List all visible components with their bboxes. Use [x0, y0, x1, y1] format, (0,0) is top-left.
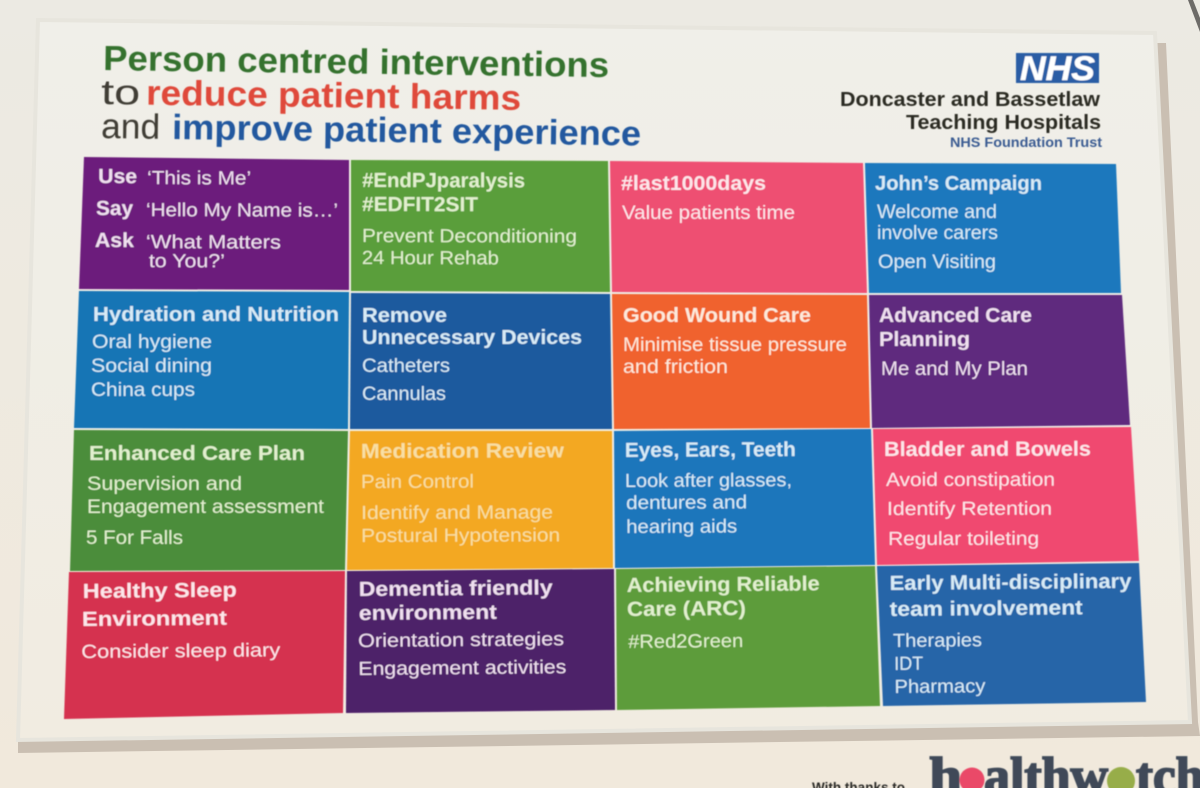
panel text: Avoid constipation: [886, 470, 1055, 491]
panel text: China cups: [91, 380, 195, 401]
panel text: [875, 172, 1042, 273]
panel text: Social dining: [91, 356, 212, 377]
panel text: Identify Retention: [887, 499, 1052, 520]
panel text: Remove: [362, 304, 447, 327]
title: improve patient experience: [172, 108, 641, 154]
panel text: Therapies: [893, 630, 982, 652]
panel text: John’s Campaign: [875, 172, 1042, 195]
title: [101, 39, 641, 154]
panel text: Early Multi-disciplinary: [889, 570, 1132, 595]
panel text: Postural Hypotension: [361, 525, 560, 547]
panel: Dementia friendly environment: [346, 569, 615, 713]
panel: Good Wound Care: [612, 294, 870, 429]
panel text: [621, 172, 795, 224]
panel text: Me and My Plan: [881, 359, 1028, 380]
NHS trust logo: NHS: [1020, 50, 1095, 88]
NHS trust logo: NHS Foundation Trust: [950, 134, 1102, 150]
panel: Achieving Reliable Care: [616, 566, 880, 710]
panel text: Environment: [82, 607, 227, 631]
panel text: Welcome and: [877, 202, 997, 223]
panel text: involve carers: [877, 223, 998, 244]
panel text: Oral hygiene: [92, 332, 212, 353]
panel text: Healthy Sleep: [83, 579, 237, 603]
healthwatch logo: [929, 748, 1200, 788]
panel text: #EndPJparalysis: [362, 169, 525, 192]
panel text: [623, 304, 847, 378]
prompts text: Use: [98, 165, 137, 188]
prompts text: ‘This is Me’: [147, 168, 251, 189]
prompts text: ‘Hello My Name is…’: [146, 200, 338, 222]
panel text: Cannulas: [362, 384, 446, 405]
panel text: environment: [359, 601, 497, 625]
panel text: Medication Review: [361, 439, 564, 463]
panel text: Open Visiting: [878, 252, 996, 273]
panel text: Pharmacy: [894, 676, 986, 698]
panel text: team involvement: [890, 596, 1083, 621]
NHS trust logo: [840, 50, 1102, 150]
title: and: [101, 107, 160, 147]
panel: Healthy Sleep Environment: [64, 571, 345, 719]
NHS trust logo: Teaching Hospitals: [906, 112, 1101, 134]
prompts text: ‘What Matters: [146, 232, 281, 253]
panel text: Achieving Reliable: [627, 572, 820, 597]
panel text: hearing aids: [626, 516, 737, 538]
panel text: Pain Control: [361, 472, 474, 493]
panel: John's Campaign: [865, 163, 1121, 293]
panel text: #last1000days: [621, 172, 766, 195]
title: Person centred interventions: [103, 39, 609, 85]
panel text: Dementia friendly: [359, 576, 553, 601]
panel text: Consider sleep diary: [81, 640, 281, 663]
panel text: [362, 304, 582, 405]
panel: last1000days: [610, 161, 867, 293]
panel text: Enhanced Care Plan: [89, 442, 305, 465]
panel: Early Multi-disciplinary team involvement: [877, 563, 1146, 706]
panel text: dentures and: [626, 492, 747, 514]
panel text: [362, 169, 577, 270]
panel: Remove Unnecessary Devices: [350, 293, 612, 429]
panel: Bladder and Bowels: [873, 427, 1139, 565]
title: to: [101, 73, 140, 113]
prompts text: Ask: [95, 229, 135, 252]
panel: Advanced Care Planning: [869, 295, 1130, 428]
panel text: [627, 572, 820, 653]
title: reduce patient harms: [146, 74, 521, 118]
panel text: [361, 439, 564, 547]
panel text: [86, 442, 325, 549]
panel text: Look after glasses,: [625, 470, 792, 492]
panel text: [884, 438, 1091, 550]
panel text: IDT: [894, 654, 924, 675]
panel text: Good Wound Care: [623, 304, 811, 327]
panel text: Eyes, Ears, Teeth: [625, 438, 796, 462]
panel text: Engagement assessment: [87, 497, 325, 518]
panel text: Care (ARC): [627, 597, 746, 621]
panel text: [889, 570, 1133, 698]
panel text: Hydration and Nutrition: [93, 303, 339, 326]
panel text: #EDFIT2SIT: [362, 193, 479, 216]
prompts text: Say: [96, 197, 134, 220]
panel text: [81, 578, 281, 663]
panel: person centred prompts: [79, 157, 349, 290]
panel text: Identify and Manage: [361, 502, 553, 524]
panel: Eyes, Ears, Teeth: [614, 429, 875, 568]
panel text: #Red2Green: [628, 631, 743, 653]
panel text: Orientation strategies: [358, 629, 564, 652]
prompts text: [95, 165, 338, 273]
panel text: Advanced Care: [879, 304, 1032, 327]
panel: Medication Review: [347, 431, 613, 570]
panel text: Regular toileting: [888, 529, 1039, 550]
panel text: [879, 304, 1032, 380]
panel: Hydration and Nutrition: [74, 291, 349, 429]
NHS trust logo: Doncaster and Bassetlaw: [840, 89, 1100, 111]
panel text: 5 For Falls: [86, 528, 183, 549]
panel text: Unnecessary Devices: [362, 326, 582, 349]
prompts text: to You?’: [149, 251, 225, 272]
panel text: Minimise tissue pressure: [623, 335, 847, 356]
panel: EndPJparalysis: [351, 160, 610, 292]
panel text: and friction: [623, 357, 728, 378]
panel: Enhanced Care Plan: [70, 430, 348, 571]
panel text: [625, 438, 796, 538]
panel text: 24 Hour Rehab: [362, 248, 499, 269]
panel text: [358, 576, 566, 680]
panel text: Planning: [879, 328, 970, 351]
panel text: [91, 303, 339, 401]
panel text: Value patients time: [622, 203, 795, 224]
panel text: Engagement activities: [358, 657, 566, 680]
panel text: Supervision and: [87, 474, 242, 495]
panel text: Bladder and Bowels: [884, 438, 1091, 461]
panel text: Catheters: [362, 356, 450, 377]
panel text: Prevent Deconditioning: [362, 226, 577, 248]
